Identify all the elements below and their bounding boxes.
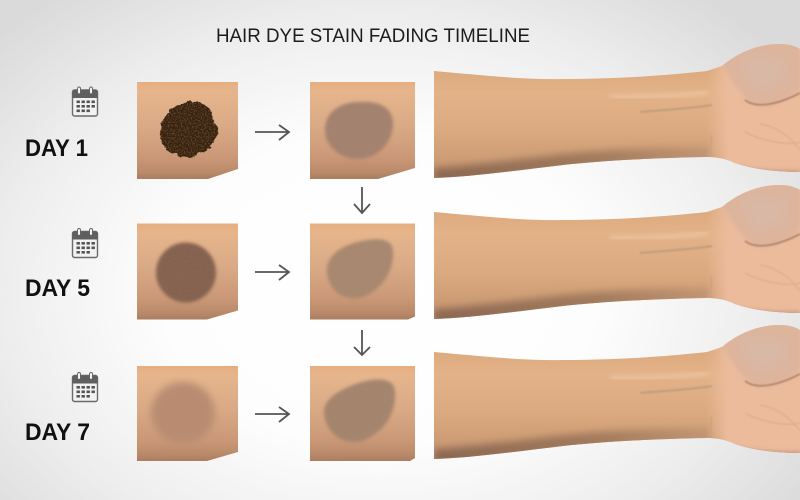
day 1 label: DAY 1 (25, 135, 88, 162)
icon: day 7 calendar (72, 372, 98, 402)
panel: day 1 row (25, 40, 800, 213)
arrow: day 5 down (354, 330, 370, 355)
forearm and hand: day 7 (434, 321, 800, 461)
day 7 stain photo (137, 366, 238, 461)
day 5 stain photo (137, 224, 238, 320)
icon: day 5 calendar (72, 228, 98, 258)
icon: day 1 calendar (72, 87, 98, 116)
arrow: day 7 right (255, 407, 289, 422)
day 7 label: DAY 7 (25, 419, 90, 446)
day 1 faded stain photo (310, 82, 415, 179)
forearm and hand: day 1 (434, 40, 800, 180)
day 1 stain photo (137, 82, 238, 179)
arrow: day 1 down (354, 187, 370, 213)
arrow: day 1 right (255, 125, 289, 140)
day 5 label: DAY 5 (25, 275, 90, 302)
day 5 faded stain photo (310, 224, 415, 320)
panel: day 7 row (25, 321, 800, 461)
day 7 faded stain photo (310, 366, 415, 461)
panel: day 5 row (25, 181, 800, 355)
title: HAIR DYE STAIN FADING TIMELINE (216, 26, 530, 47)
forearm and hand: day 5 (434, 181, 800, 321)
arrow: day 5 right (255, 265, 289, 280)
